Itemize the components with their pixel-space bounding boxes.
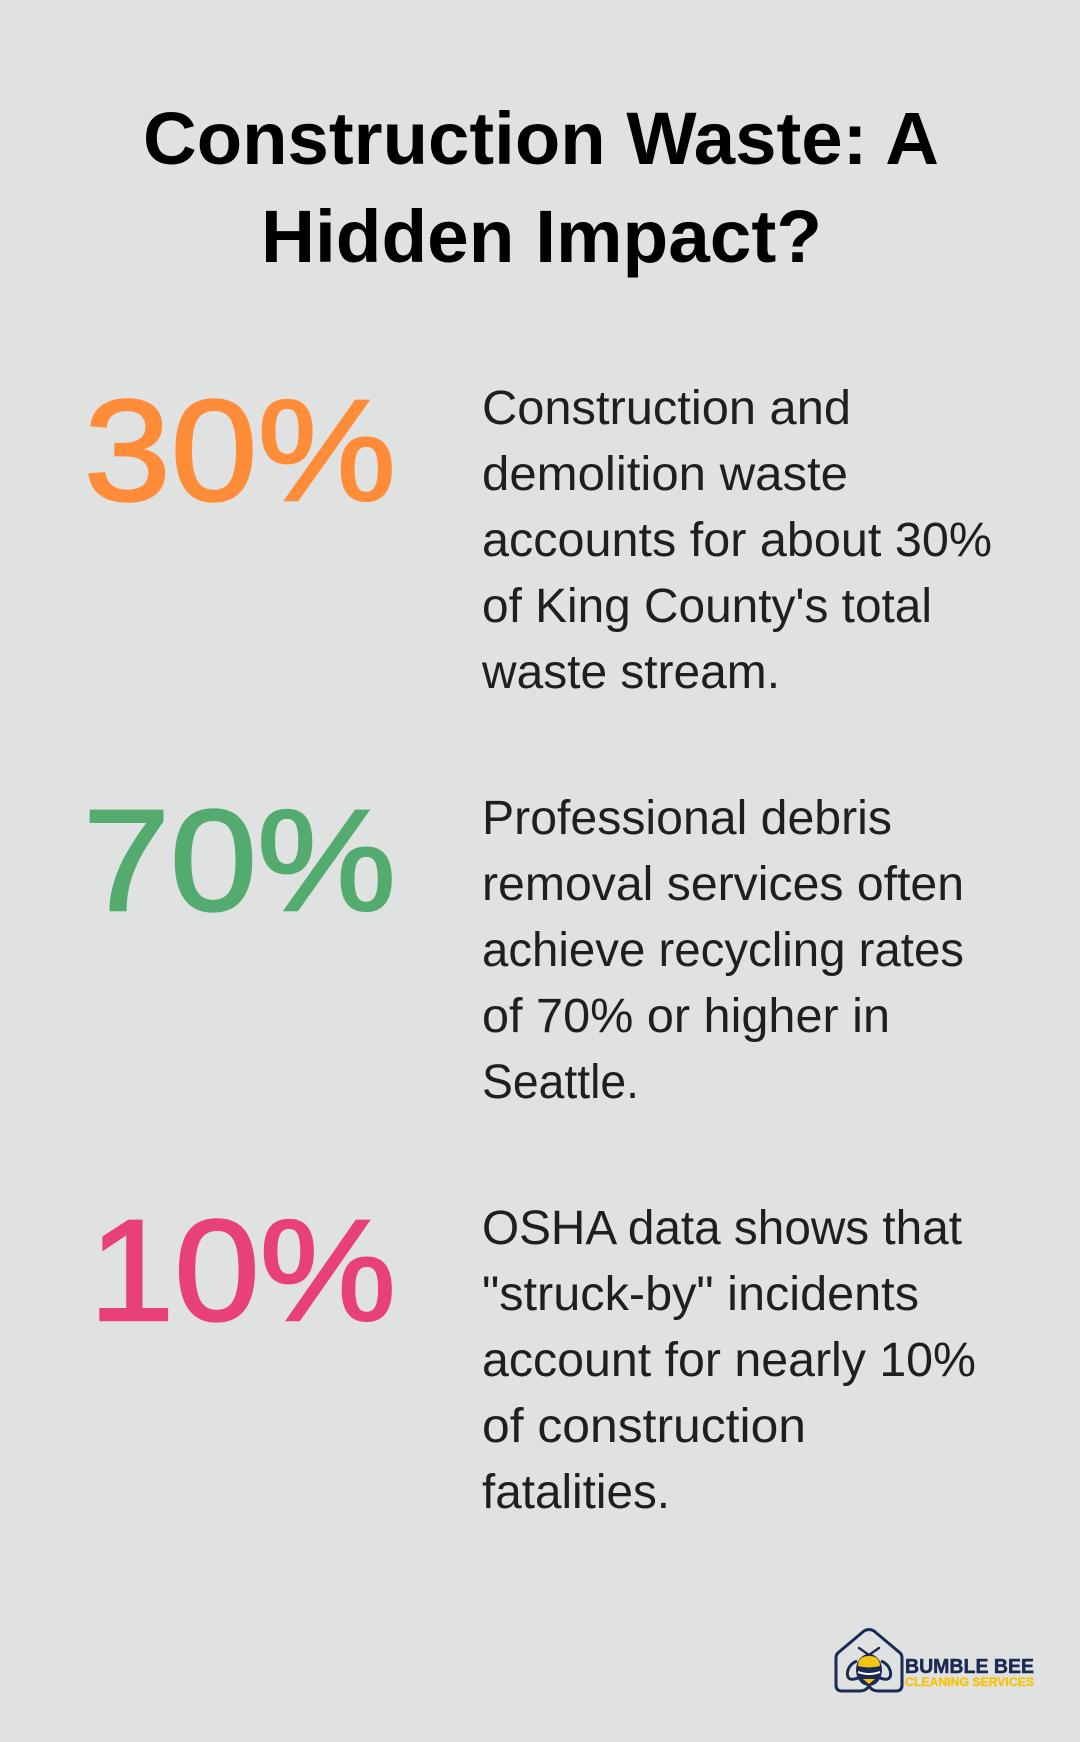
panel: 70% stat [83,780,964,1109]
title: Hidden Impact? [261,195,822,278]
text block: 30% description: demolition waste [482,448,848,501]
panel: 10% stat [89,1190,976,1519]
text block: 10% description: account for nearly 10% [482,1334,976,1387]
stat number: 10%: 10% [89,1190,396,1351]
text block: 10% description: OSHA data shows that [482,1202,962,1255]
text block: 70% description: achieve recycling rates [482,924,964,977]
text block: 10% description: fatalities. [482,1466,670,1519]
text block: 30% description: waste stream. [481,646,780,699]
text block: 30% description [481,382,992,699]
stat number: 30%: 30% [84,370,396,531]
text block: 70% description: Professional debris [482,792,892,845]
stat number: 70%: 70% [83,780,396,941]
title: Construction Waste: A [143,97,939,180]
text block: 70% description: Seattle. [482,1056,639,1109]
icon: house with bee [836,1630,902,1691]
text block: 10% description: of construction [482,1400,806,1453]
logo: Bumble Bee Cleaning Services [836,1630,1034,1691]
logo tagline: CLEANING SERVICES [905,1675,1034,1689]
text block: 10% description: "struck-by" incidents [482,1268,919,1321]
logo wordmark: BUMBLE BEE [905,1656,1034,1678]
title [143,97,939,278]
text block: 30% description: of King County's total [482,580,932,633]
text block: 70% description [482,792,964,1109]
text block: 10% description [482,1202,976,1519]
panel: 30% stat [84,370,992,699]
text block: 70% description: removal services often [482,858,964,911]
text block: 30% description: Construction and [482,382,851,435]
text block: 70% description: of 70% or higher in [482,990,890,1043]
text block: 30% description: accounts for about 30% [482,514,992,567]
